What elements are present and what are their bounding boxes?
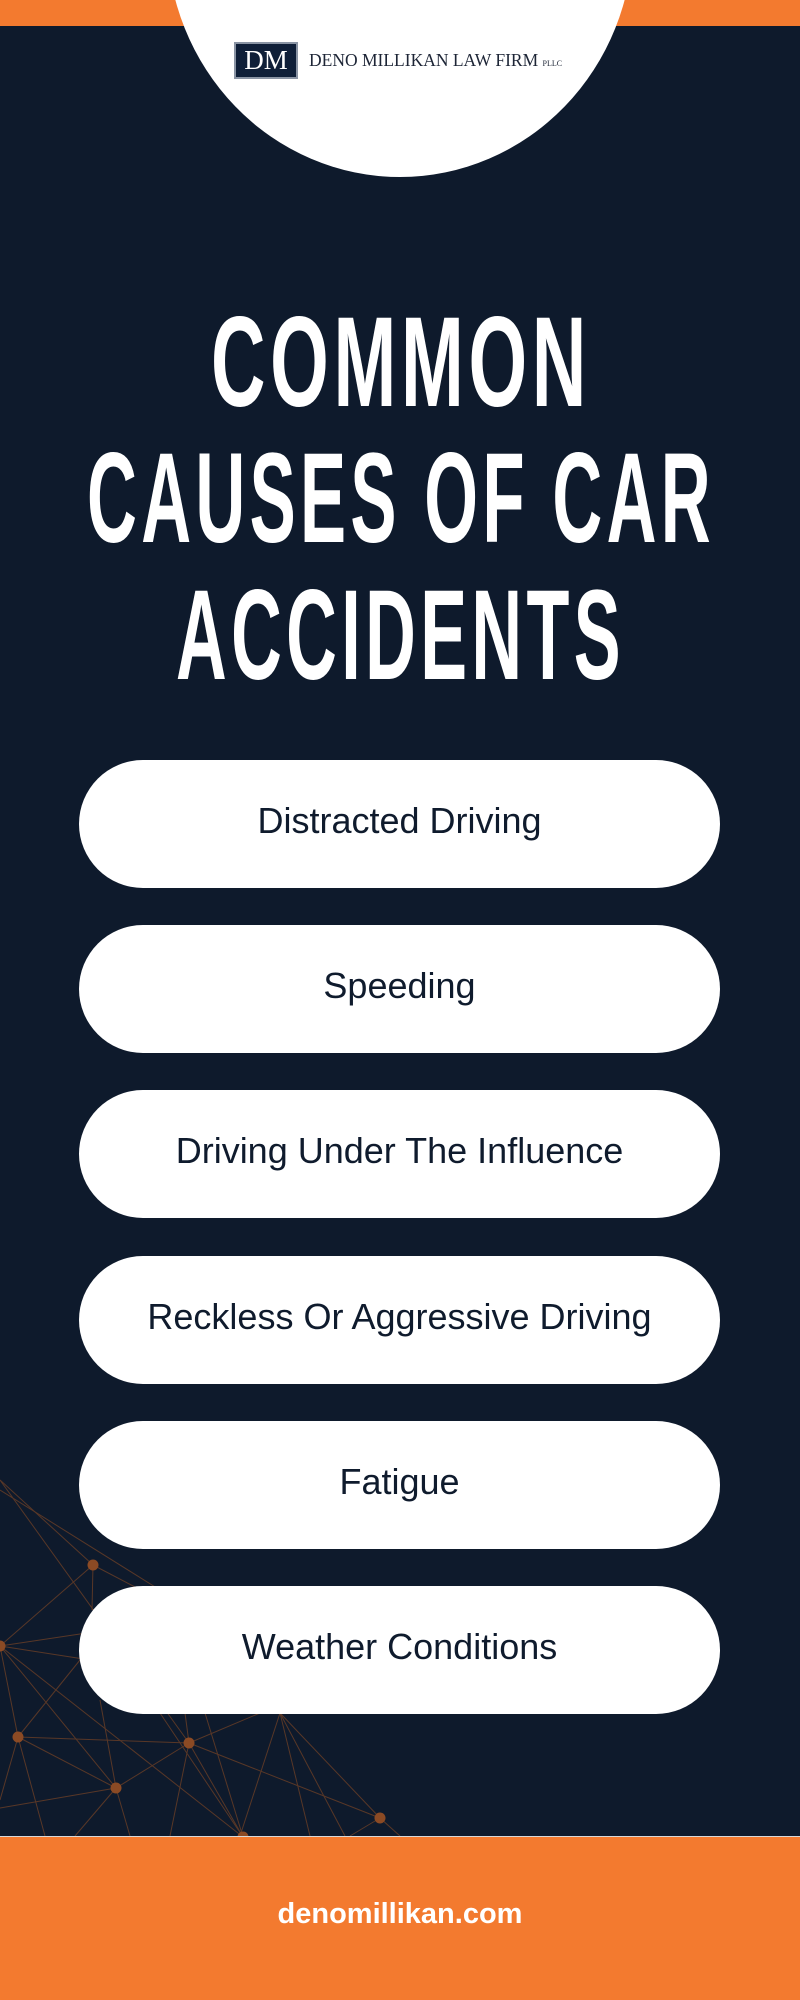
- pill: Driving Under The Influence: [79, 1090, 720, 1218]
- pill: Speeding: Speeding: [323, 965, 476, 1006]
- pill: Speeding: [79, 925, 720, 1053]
- footer: [0, 1836, 800, 2000]
- pill: Weather Conditions: [79, 1586, 720, 1714]
- logo wordmark: DENO MILLIKAN LAW FIRM PLLC: [309, 50, 562, 70]
- logo header circle: [167, 0, 633, 177]
- logo: [234, 42, 562, 79]
- logo mark DM: [234, 42, 298, 79]
- pill: Fatigue: Fatigue: [339, 1461, 460, 1502]
- pill: Weather Conditions: Weather Conditions: [242, 1626, 557, 1667]
- pill: Reckless Or Aggressive Driving: [79, 1256, 720, 1384]
- logo mark DM: DM: [244, 45, 288, 75]
- pill: Driving Under The Influence: Driving Under The Influence: [176, 1130, 623, 1171]
- pill: Distracted Driving: Distracted Driving: [257, 800, 542, 841]
- top orange band: [0, 0, 800, 26]
- pill: Reckless Or Aggressive Driving: Reckless Or Aggressive Driving: [147, 1296, 652, 1337]
- pill: Fatigue: [79, 1421, 720, 1549]
- title: [87, 291, 715, 700]
- footer: denomillikan.com: [278, 1898, 522, 1930]
- pill: Distracted Driving: [79, 760, 720, 888]
- network decoration: [0, 1480, 400, 1836]
